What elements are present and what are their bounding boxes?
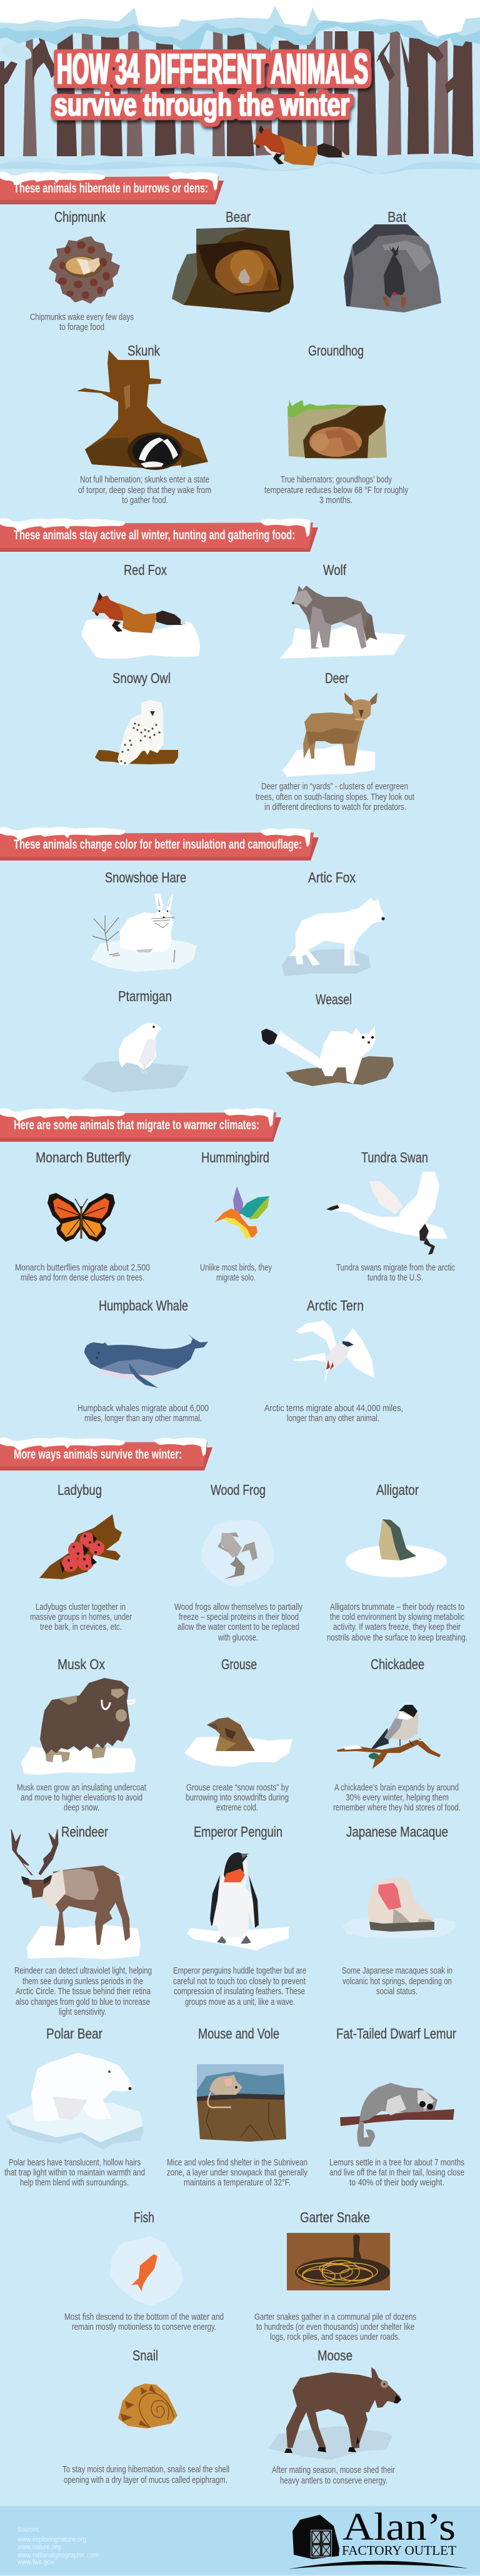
sources: www.fws.gov	[17, 2559, 54, 2566]
wordmark: Alan’s	[342, 2506, 456, 2549]
section: migrate	[0, 1108, 455, 1424]
heading: Mouse and Vole	[198, 2025, 279, 2042]
caption: Arctic terns migrate about 44,000 miles,	[264, 1403, 403, 1414]
tree trunks	[0, 31, 473, 156]
panel: hummingbird	[200, 1149, 272, 1283]
icon: japanese macaque in hot spring	[342, 1877, 456, 1939]
heading: Humpback Whale	[99, 1297, 188, 1314]
caption: Wood frogs allow themselves to partially	[174, 1602, 302, 1612]
caption: Garter snakes gather in a communal pile of dozens	[254, 2312, 416, 2322]
caption: To stay moist during hibernation, snails seal the shell	[62, 2464, 229, 2475]
panel: mouse and vole	[167, 2025, 308, 2188]
caption	[78, 474, 211, 506]
caption	[174, 1602, 302, 1643]
icon: ladybugs on branch	[39, 1514, 122, 1579]
icon: groundhog burrow	[288, 400, 387, 459]
panel: chipmunk	[30, 209, 134, 332]
banner: more ways	[0, 1437, 212, 1470]
logo: Alan's Factory Outlet	[288, 2506, 469, 2569]
caption	[254, 2312, 416, 2342]
footer	[0, 2506, 480, 2575]
icon: red fox on snow	[81, 592, 200, 659]
heading: Emperor Penguin	[194, 1824, 282, 1840]
icon: tundra swan	[326, 1172, 448, 1255]
caption: 30% every winter, helping them	[346, 1792, 449, 1803]
heading: Groundhog	[308, 342, 364, 359]
icon: arctic tern	[292, 1320, 374, 1384]
icon: emperor penguin on snow	[187, 1852, 289, 1950]
panel: arctic tern	[264, 1297, 403, 1424]
icon: ptarmigan	[81, 1022, 189, 1092]
caption: logs, rock piles, and spaces under roads.	[270, 2332, 400, 2342]
icon: chickadee on branch	[337, 1705, 441, 1769]
caption: zone, a layer under snowpack that generally	[167, 2167, 308, 2178]
caption	[78, 1403, 209, 1424]
caption: freeze – special proteins in their blood	[179, 1612, 299, 1622]
caption	[30, 1602, 132, 1632]
panel: chickadee	[333, 1656, 461, 1813]
heading: Red Fox	[124, 562, 167, 578]
heading: Fish	[134, 2209, 154, 2225]
banner: active: These animals stay active all winter, hunting and gathering food:	[14, 528, 295, 542]
caption: Grouse create “snow roosts” by	[186, 1782, 289, 1793]
caption: Most fish descend to the bottom of the water and	[64, 2312, 224, 2322]
caption: of torpor, deep sleep that they wake from	[78, 485, 211, 496]
banner: hibernate: These animals hibernate in burrows or dens:	[14, 181, 208, 196]
caption	[64, 2312, 224, 2332]
icon: skunk under tree	[77, 350, 208, 470]
sources: www.exploringnature.org	[17, 2536, 86, 2544]
caption: remain mostly motionless to conserve energy.	[72, 2322, 216, 2332]
heading: Moose	[318, 2347, 352, 2364]
heading: Grouse	[221, 1656, 257, 1672]
panel: fish	[64, 2209, 224, 2332]
wordmark subtitle: FACTORY OUTLET	[342, 2543, 456, 2558]
title: survive through the winter	[54, 87, 349, 123]
icon: humpback whale	[84, 1335, 208, 1388]
panel: polar bear	[4, 2025, 145, 2188]
panel: moose	[268, 2347, 401, 2486]
panel: bear	[172, 209, 294, 312]
panel: fat-tailed dwarf lemur	[329, 2025, 464, 2188]
panel: garter snake	[254, 2209, 416, 2342]
caption	[200, 1262, 272, 1283]
caption	[336, 1262, 455, 1283]
panel: skunk	[77, 342, 211, 506]
caption	[173, 1965, 306, 2007]
banner: hibernate	[0, 172, 224, 204]
caption	[15, 1262, 150, 1283]
caption: social status.	[376, 1986, 418, 1997]
caption: temperature reduces below 68 °F for roughly	[264, 485, 408, 496]
caption: Arctic Circle. The tissue behind their retina	[16, 1986, 151, 1997]
icon: polar bear on ice	[7, 2053, 143, 2150]
icon: mouse in subnivean zone	[197, 2064, 286, 2142]
heading: Snowshoe Hare	[105, 869, 186, 886]
panel: snowy owl	[95, 670, 178, 765]
panel: deer	[256, 670, 415, 812]
caption: True hibernators; groundhogs’ body	[281, 474, 392, 485]
caption: to 40% of their body weight.	[349, 2177, 444, 2188]
caption: to forage food	[59, 322, 104, 332]
caption: massive groups in homes, under	[30, 1612, 132, 1622]
panel: ladybug	[30, 1482, 132, 1632]
heading: Reindeer	[61, 1824, 108, 1840]
caption	[329, 2157, 464, 2188]
snowy ground	[0, 153, 480, 250]
banner: migrate	[0, 1108, 281, 1142]
caption	[264, 1403, 403, 1424]
icon: weasel with black tail tip	[261, 1026, 394, 1086]
caption: Monarch butterflies migrate about 2,500	[15, 1262, 150, 1273]
icon: fox in snow	[253, 125, 348, 166]
icon: deer on snow	[282, 692, 378, 777]
icon: wood frog in ice	[201, 1520, 274, 1586]
heading: Snail	[132, 2347, 158, 2364]
heading: Arctic Tern	[307, 1297, 364, 1314]
caption	[17, 1782, 147, 1813]
panel: alligator	[327, 1482, 468, 1643]
icon: snowshoe hare	[91, 894, 197, 972]
caption: tundra to the U.S.	[368, 1272, 423, 1283]
header illustration: snowy forest	[0, 0, 480, 250]
caption	[186, 1782, 289, 1813]
caption	[333, 1782, 461, 1813]
heading: Hummingbird	[201, 1149, 269, 1166]
icon: chipmunk in leaf nest	[49, 236, 120, 304]
sources	[17, 2526, 99, 2566]
caption: with glucose.	[218, 1632, 258, 1643]
icon: hummingbird	[214, 1186, 269, 1239]
caption: Humpback whales migrate about 6,000	[78, 1403, 209, 1414]
icon: snail shell	[118, 2384, 178, 2429]
heading: Artic Fox	[308, 869, 356, 886]
caption: maintains a temperature of 32°F.	[184, 2177, 291, 2188]
banner: active	[0, 518, 318, 552]
caption: Unlike most birds, they	[200, 1262, 272, 1273]
caption: burrowing into snowdrifts during	[186, 1792, 289, 1803]
icon: grouse in snow	[184, 1717, 292, 1767]
panel: japanese macaque	[342, 1824, 456, 1997]
footer band	[0, 2506, 480, 2575]
icon: bat in cave	[344, 224, 441, 312]
caption	[342, 1965, 452, 1997]
heading: Deer	[325, 670, 349, 686]
icon: garter snakes in den	[287, 2233, 390, 2290]
panel: emperor penguin	[173, 1824, 306, 2007]
sources: www.nationalgeographic.com	[17, 2552, 99, 2559]
panel: groundhog	[264, 342, 408, 506]
banner: migrate: Here are some animals that migrate to warmer climates:	[14, 1118, 259, 1132]
panel: monarch butterfly	[15, 1149, 150, 1283]
caption: opening with a dry layer of mucus called epiphragm.	[64, 2475, 228, 2485]
caption: Musk oxen grow an insulating undercoat	[17, 1782, 147, 1793]
caption: miles and form dense clusters on trees.	[21, 1272, 144, 1283]
panel: wolf	[279, 562, 406, 659]
caption: also changes from gold to blue to increase	[16, 1997, 150, 2007]
caption	[264, 474, 408, 506]
caption: Mice and voles find shelter in the Subnivean	[167, 2157, 308, 2168]
snow canopy	[0, 0, 480, 61]
heading: Weasel	[316, 991, 352, 1007]
panel: ptarmigan	[81, 988, 189, 1092]
caption: help them blend with surroundings.	[20, 2177, 129, 2188]
caption: in different directions to watch for predators.	[264, 802, 406, 812]
icon: moose	[268, 2367, 401, 2460]
caption: Reindeer can detect ultraviolet light, helping	[14, 1965, 152, 1976]
heading: Polar Bear	[46, 2025, 102, 2042]
caption: careful not to touch too closely to prevent	[173, 1976, 306, 1987]
caption: 3 months.	[319, 495, 352, 506]
heading: Ladybug	[58, 1482, 102, 1498]
panel: snail	[62, 2347, 229, 2485]
heading: Ptarmigan	[118, 988, 172, 1004]
panel: weasel	[261, 991, 394, 1086]
caption: light sensitivity.	[59, 2007, 106, 2017]
caption: to hundreds (or even thousands) under shelter like	[256, 2322, 414, 2332]
sources: Sources:	[18, 2526, 40, 2534]
icon: bear in cave	[172, 227, 294, 312]
caption	[14, 1965, 152, 2017]
icon: snowy owl on rock	[95, 700, 178, 765]
caption: and move to higher elevations to avoid	[21, 1792, 142, 1803]
section: change color	[0, 827, 394, 1092]
banner: more ways: More ways animals survive the winter:	[14, 1447, 182, 1462]
panel: snowshoe hare	[91, 869, 197, 972]
panel: musk ox	[17, 1656, 147, 1813]
caption: compression of insulating feathers. These	[174, 1986, 305, 1997]
icon: lemur on branch	[340, 2083, 454, 2147]
heading: Alligator	[376, 1482, 419, 1498]
panel: wood frog	[174, 1482, 302, 1643]
swoosh	[288, 2561, 469, 2569]
heading: Wolf	[323, 562, 346, 578]
caption: extreme cold.	[216, 1802, 258, 1813]
caption	[256, 781, 415, 812]
icon: wolf on snow	[279, 586, 406, 659]
caption: Deer gather in “yards” - clusters of evergreen	[261, 781, 408, 792]
section: hibernate	[0, 172, 441, 506]
panel: artic fox	[282, 869, 385, 976]
caption: Not full hibernation; skunks enter a state	[80, 474, 209, 485]
caption: Polar bears have translucent, hollow hairs	[9, 2157, 141, 2168]
caption: Emperor penguins huddle together but are	[173, 1965, 306, 1976]
caption: them see during sunless periods in the	[22, 1976, 143, 1987]
caption	[167, 2157, 308, 2188]
panel: reindeer	[11, 1824, 152, 2017]
icon: fish in ice	[109, 2236, 183, 2306]
title	[54, 44, 368, 123]
caption: trees, often on south-facing slopes. They look out	[256, 792, 415, 802]
heading: Wood Frog	[211, 1482, 266, 1498]
icon: arctic fox	[282, 898, 385, 976]
sources: www.nature.org	[17, 2544, 61, 2551]
caption: longer than any other animal.	[287, 1413, 379, 1424]
caption: After mating season, moose shed their	[272, 2465, 395, 2475]
caption: that trap light within to maintain warmth and	[4, 2167, 145, 2178]
caption: allow the water content to be replaced	[178, 1622, 299, 1632]
section: active all winter	[0, 518, 415, 812]
heading: Chickadee	[371, 1656, 424, 1672]
heading: Bat	[388, 209, 407, 225]
icon: alligator snout in ice	[346, 1519, 447, 1577]
caption: Ladybugs cluster together in	[36, 1602, 126, 1612]
caption: to gather food.	[122, 495, 168, 506]
caption	[4, 2157, 145, 2188]
heading: Monarch Butterfly	[36, 1149, 131, 1166]
heading: Musk Ox	[58, 1656, 105, 1672]
banner: change color	[0, 827, 319, 861]
heading: Snowy Owl	[112, 670, 171, 686]
heading: Garter Snake	[300, 2209, 370, 2225]
caption: heavy antlers to conserve energy.	[280, 2475, 388, 2486]
icon: reindeer on snow	[11, 1829, 141, 1959]
section: more ways	[0, 1437, 468, 2486]
panel: humpback whale	[78, 1297, 209, 1424]
icon: monarch butterfly	[48, 1193, 115, 1242]
caption	[62, 2464, 229, 2485]
panel: red fox	[81, 562, 200, 659]
caption: tree bark, in crevices, etc.	[40, 1622, 122, 1632]
heading: Tundra Swan	[361, 1149, 428, 1166]
caption	[272, 2465, 395, 2486]
caption: Chipmunks wake every few days	[30, 312, 134, 322]
heading: Bear	[226, 209, 251, 225]
heading: Japanese Macaque	[346, 1824, 448, 1840]
icon: barn	[292, 2515, 339, 2559]
heading: Skunk	[128, 342, 160, 359]
panel: tundra swan	[326, 1149, 455, 1283]
icon: musk ox on snow	[21, 1678, 136, 1775]
caption: groups move as a unit, like a wave.	[185, 1997, 295, 2007]
caption	[30, 312, 134, 332]
panel: bat	[344, 209, 441, 312]
panel: grouse	[184, 1656, 292, 1813]
caption: deep snow.	[64, 1802, 99, 1813]
banner: change color: These animals change color for better insulation and camouflage:	[14, 837, 302, 852]
heading: Chipmunk	[54, 209, 106, 225]
caption: migrate solo.	[216, 1272, 256, 1283]
caption: miles, longer than any other mammal.	[84, 1413, 202, 1424]
caption	[327, 1602, 468, 1643]
